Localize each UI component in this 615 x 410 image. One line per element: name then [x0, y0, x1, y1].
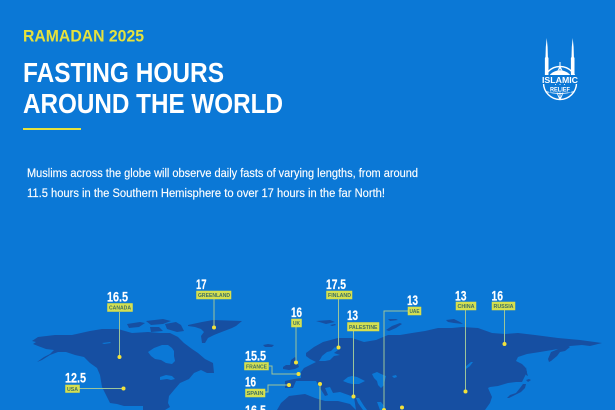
Arctic islands — [127, 319, 184, 332]
Aral Sea — [392, 375, 397, 378]
label: Spain 16: 16 — [245, 374, 256, 390]
UK and Ireland — [283, 357, 299, 370]
label: Greenland 17: GREENLAND — [198, 293, 230, 299]
label: Greenland 17 — [196, 277, 231, 330]
label: China 13: 13 — [455, 289, 467, 304]
Caspian Sea — [372, 372, 386, 388]
world map — [32, 319, 602, 410]
label: Spain 16 — [245, 374, 291, 397]
Eurasia — [285, 327, 602, 410]
label: UK 16: UK — [293, 321, 300, 327]
label: Canada 16.5 — [107, 290, 132, 359]
North America — [32, 329, 214, 410]
label: Russia 16 — [492, 289, 515, 346]
label: Canada 16.5: CANADA — [109, 306, 131, 312]
Japan — [507, 384, 526, 398]
Lake Baikal — [465, 362, 473, 369]
label: China 13 — [455, 289, 476, 394]
Black Sea — [343, 376, 365, 384]
label: Finland 17.5 — [326, 277, 352, 350]
label: France 15.5 — [244, 348, 300, 376]
label: 16.5 clipped at lower edge — [245, 382, 322, 410]
label: Greenland 17: 17 — [196, 277, 206, 292]
Africa — [277, 394, 356, 410]
Great Lakes — [102, 342, 175, 380]
Kamchatka — [548, 346, 570, 362]
label: Palestine 13: 13 — [347, 308, 358, 323]
label: UAE 13: 13 — [407, 293, 418, 308]
Hudson Bay — [148, 345, 175, 364]
title: AROUND THE WORLD — [23, 88, 283, 119]
label: France 15.5: FRANCE — [246, 364, 267, 370]
intro text: 11.5 hours in the Southern Hemisphere to over 17 hours in the far North! — [27, 186, 385, 200]
label: Palestine 13 — [347, 308, 379, 398]
logo: Islamic Relief: RELIEF — [550, 86, 570, 94]
title: FASTING HOURS — [23, 57, 224, 88]
label: Palestine 13: PALESTINE — [349, 325, 378, 331]
label: Spain 16: SPAIN — [246, 391, 264, 397]
label: UK 16: 16 — [291, 305, 302, 320]
title underline — [23, 128, 81, 130]
label: USA 12.5: USA — [67, 387, 78, 393]
intro text — [27, 166, 418, 200]
logo: Islamic Relief: ISLAMIC — [542, 75, 578, 85]
logo: Islamic Relief — [541, 38, 579, 100]
subtitle: Ramadan 2025: RAMADAN 2025 — [23, 28, 144, 46]
label: UAE 13: UAE — [410, 309, 420, 315]
inland water — [102, 342, 473, 410]
label: France 15.5: 15.5 — [245, 348, 266, 364]
label: Finland 17.5: FINLAND — [328, 293, 351, 299]
label: USA 12.5: 12.5 — [65, 371, 86, 386]
Greenland — [188, 320, 242, 343]
Baltic — [319, 347, 340, 361]
label: UK 16 — [291, 305, 302, 364]
intro text: Muslims across the globe will observe daily fasts of varying lengths, from around — [27, 166, 418, 180]
label: UAE 13 — [382, 293, 421, 410]
label: Russia 16: 16 — [492, 289, 503, 304]
northern islands — [316, 319, 463, 331]
Iceland — [263, 344, 274, 347]
Red Sea — [356, 398, 367, 410]
label: Canada 16.5: 16.5 — [107, 290, 128, 304]
label: Finland 17.5: 17.5 — [326, 277, 346, 292]
Persian Gulf — [377, 402, 385, 410]
label: USA 12.5 — [65, 371, 126, 393]
label: Russia 16: RUSSIA — [494, 304, 514, 310]
label: China 13: CHINA — [458, 304, 474, 310]
title — [23, 57, 283, 119]
